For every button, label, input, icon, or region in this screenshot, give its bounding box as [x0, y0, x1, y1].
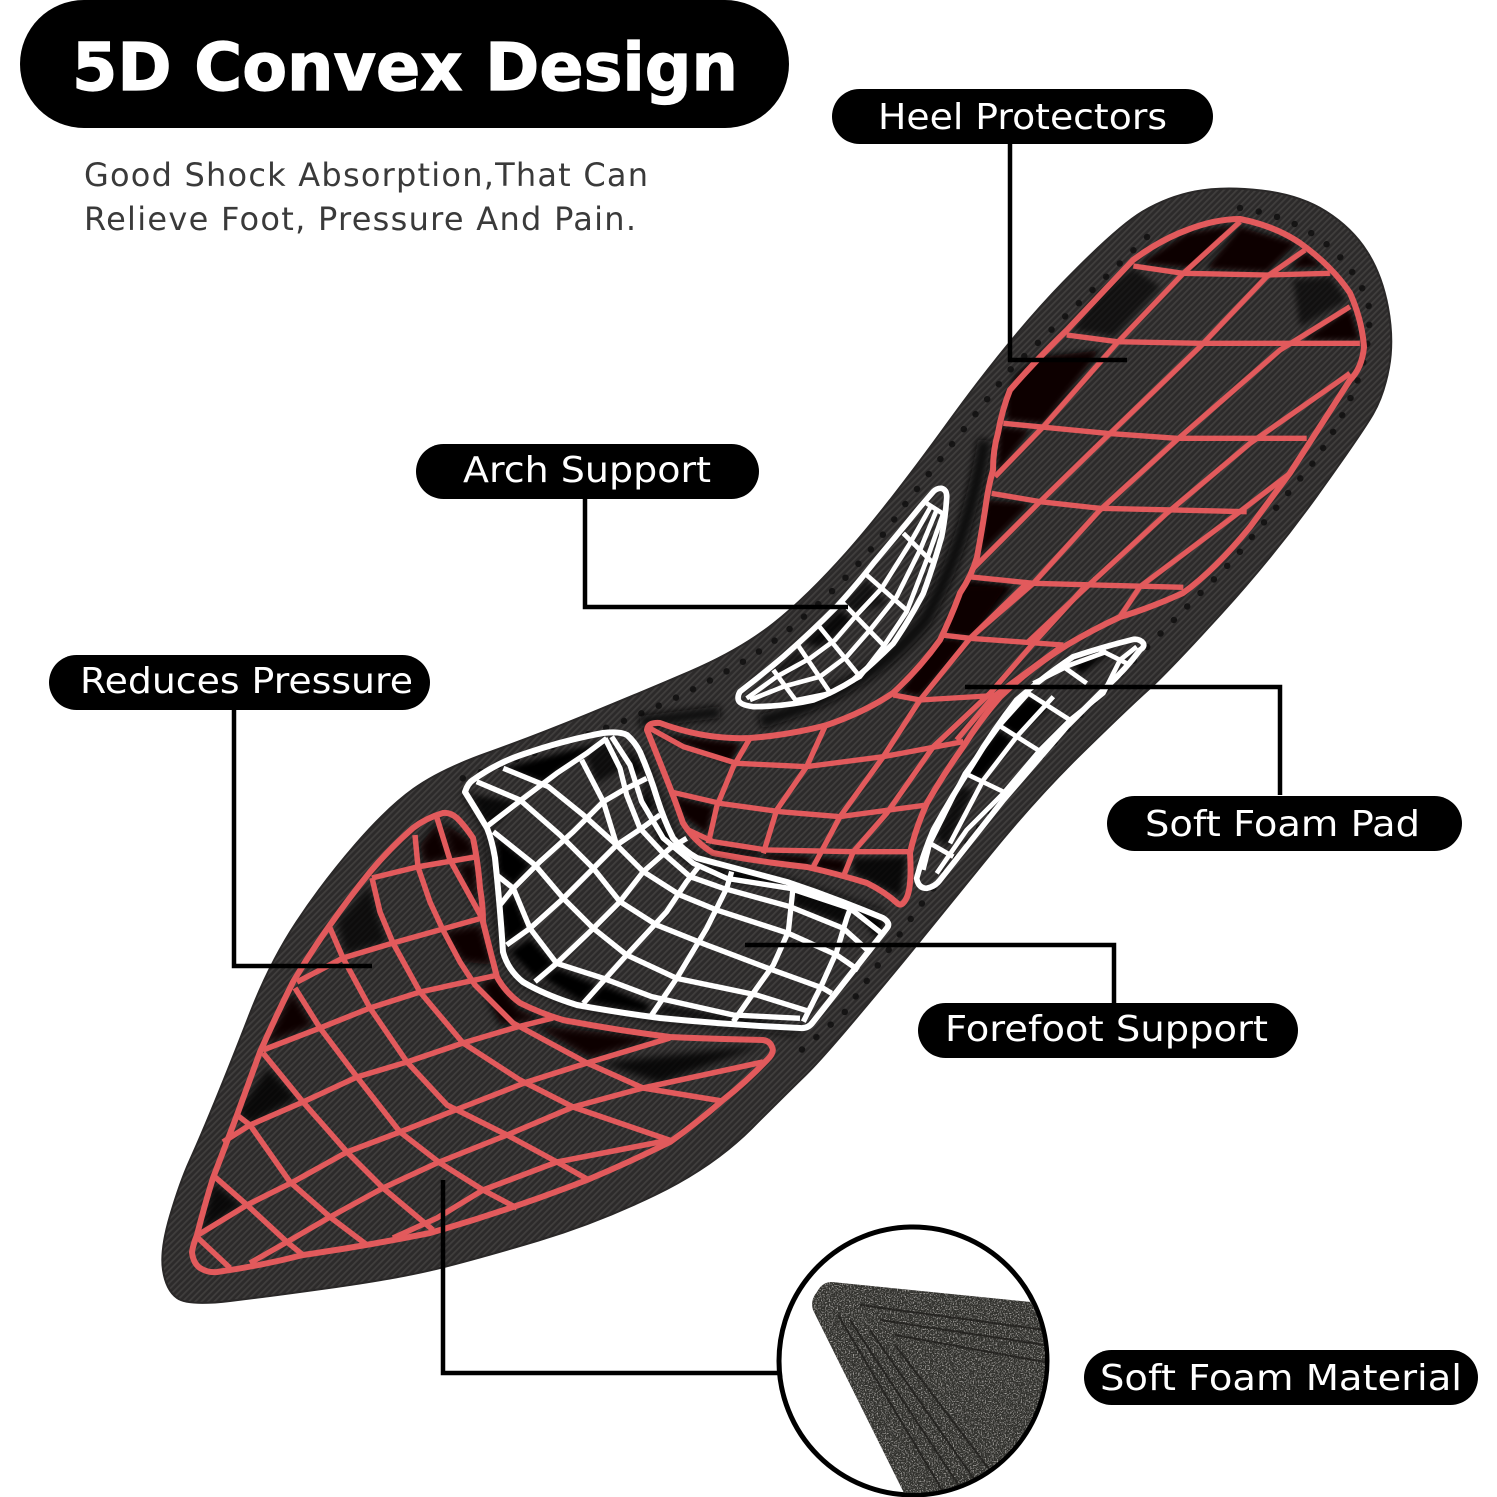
label: soft foam pad	[1107, 796, 1462, 851]
subtitle	[84, 156, 648, 238]
pad grid	[473, 737, 883, 1023]
shaded cells	[773, 580, 887, 677]
subtitle: Good Shock Absorption,That Can	[84, 156, 648, 194]
label: reduces pressure	[49, 655, 430, 710]
edge perforation dots	[458, 208, 1369, 1053]
grid lines	[747, 503, 945, 702]
shaded cells	[200, 822, 763, 1232]
outline	[738, 488, 947, 707]
grid lines	[923, 647, 1137, 873]
label: forefoot support	[918, 1003, 1298, 1058]
cross lines	[968, 222, 1360, 643]
arch white pad	[738, 488, 947, 707]
insole illustration	[162, 188, 1391, 1303]
label: heel protectors	[832, 89, 1213, 144]
magnified foam circle	[779, 1227, 1060, 1495]
heel red grid	[910, 222, 1360, 687]
label: soft foam pad: Soft Foam Pad	[1145, 804, 1420, 845]
outline	[465, 732, 888, 1028]
heel and midfoot red outline	[647, 219, 1364, 905]
outline	[192, 813, 773, 1272]
insole body	[162, 188, 1391, 1303]
leader lines	[234, 143, 1280, 1373]
cross lines	[650, 583, 1083, 877]
shaded cells	[650, 587, 1007, 897]
outer white pad	[917, 639, 1144, 888]
foam swatch	[812, 1282, 1060, 1495]
title pill: 5D Convex Design	[72, 29, 738, 106]
cross lines	[198, 818, 763, 1268]
label: reduces pressure: Reduces Pressure	[80, 661, 413, 702]
title pill	[20, 0, 789, 128]
recessed shadows	[640, 440, 985, 722]
outline	[917, 639, 1144, 888]
toe red grid	[192, 813, 773, 1272]
forefoot white pad	[465, 732, 888, 1032]
shaded cells	[473, 742, 883, 1023]
pad shadow	[465, 752, 883, 1032]
label: soft foam material	[1084, 1350, 1478, 1405]
label: soft foam material: Soft Foam Material	[1100, 1358, 1462, 1399]
shaded cells	[910, 225, 1360, 687]
subtitle: Relieve Foot, Pressure And Pain.	[84, 200, 636, 238]
midfoot red grid	[650, 583, 1083, 897]
grid lines	[477, 737, 882, 1022]
label: arch support: Arch Support	[463, 450, 711, 491]
label: arch support	[416, 444, 759, 499]
shaded cells	[935, 650, 1117, 847]
label: forefoot support: Forefoot Support	[945, 1009, 1268, 1050]
label: heel protectors: Heel Protectors	[878, 97, 1167, 138]
